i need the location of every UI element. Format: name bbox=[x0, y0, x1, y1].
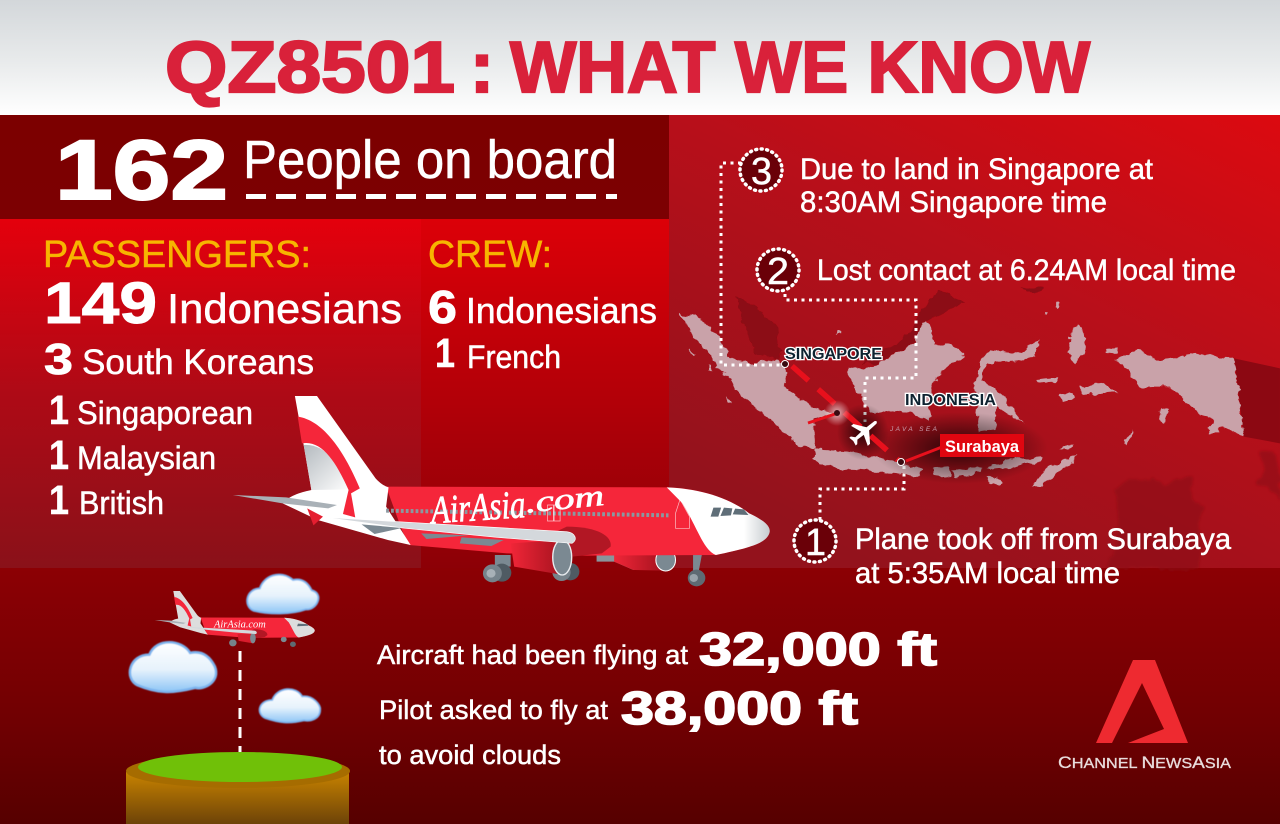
passenger count: 1 British bbox=[49, 477, 164, 523]
crew heading: CREW: bbox=[428, 234, 552, 276]
airline logo: AirAsia bbox=[427, 482, 527, 532]
passengers heading: PASSENGERS: bbox=[43, 234, 311, 276]
step 3 marker bbox=[740, 149, 782, 193]
step 1 marker: 1 bbox=[805, 522, 826, 564]
crew count: 6 Indonesians: Indonesians bbox=[466, 290, 657, 331]
total number: 162 bbox=[55, 123, 228, 217]
passenger count: 3 South Koreans: 3 bbox=[44, 335, 73, 384]
passenger count: 1 Malaysian: Malaysian bbox=[77, 440, 216, 476]
passenger count: 1 Singaporean bbox=[49, 387, 253, 433]
wing root and engine bbox=[546, 527, 611, 557]
passenger count: 1 Malaysian: 1 bbox=[49, 432, 69, 478]
Channel NewsAsia logo bbox=[1058, 660, 1231, 772]
horizontal stabiliser bbox=[233, 495, 337, 508]
label: Indonesia: INDONESIA bbox=[905, 392, 996, 409]
passenger count: 1 British: 1 bbox=[49, 477, 69, 523]
altitude text: 32,000 ft: 32,000 ft bbox=[699, 623, 937, 675]
crew count: 6 Indonesians: 6 bbox=[428, 281, 457, 333]
passenger count: 1 Singaporean: 1 bbox=[49, 387, 69, 433]
step 2 marker bbox=[757, 249, 799, 293]
logo mark bbox=[1096, 660, 1188, 743]
altitude text: 38,000 ft bbox=[379, 682, 858, 734]
passenger count: 3 South Koreans: South Koreans bbox=[82, 343, 314, 382]
flight route: Surabaya to Singapore bbox=[782, 360, 1048, 484]
step 2 marker: 2 bbox=[767, 251, 789, 293]
icon: cloud left bbox=[130, 642, 216, 692]
passenger count: 149 Indonesians bbox=[44, 271, 402, 336]
AirAsia plane illustration bbox=[233, 396, 770, 586]
rear fuselage and tail bbox=[283, 396, 411, 545]
flight path: dotted leader for step 1 bbox=[820, 462, 904, 520]
crew count: 1 French bbox=[435, 330, 561, 376]
ground cylinder bbox=[126, 752, 350, 824]
passenger count: 3 South Koreans bbox=[44, 335, 314, 384]
label: Surabaya: Surabaya bbox=[945, 437, 1020, 456]
altitude marker line bbox=[238, 651, 242, 753]
flight path: dotted leader for step 2 bbox=[785, 294, 916, 422]
Indonesian islands bbox=[680, 302, 1244, 487]
door outline bbox=[547, 499, 690, 528]
panel: people on board bbox=[0, 115, 669, 219]
cabin windows bbox=[386, 511, 669, 515]
fuselage bbox=[386, 487, 770, 556]
altitude text: 32,000 ft bbox=[377, 623, 937, 675]
map: faint Australia shading bbox=[1110, 452, 1280, 568]
title text: : bbox=[470, 28, 494, 108]
altitude text: to avoid clouds: to avoid clouds bbox=[379, 740, 561, 770]
title text: QZ8501 bbox=[165, 28, 455, 108]
passenger count: 1 British: British bbox=[79, 485, 164, 521]
step 1 text: Plane took off from Surabaya bbox=[855, 523, 1231, 556]
step 1 marker bbox=[794, 520, 836, 564]
icon: cloud right bbox=[260, 689, 320, 722]
panel: bottom section background bbox=[0, 568, 1280, 824]
icon: plane on route bbox=[844, 411, 885, 452]
crew count: 1 French: French bbox=[467, 339, 561, 375]
map of Indonesia bbox=[680, 287, 1280, 487]
Malaysia, darker land bbox=[736, 287, 1041, 364]
passenger count: 149 Indonesians: 149 bbox=[44, 271, 157, 336]
passenger count: 1 Singaporean: Singaporean bbox=[77, 395, 253, 431]
step 3: 8:30AM Singapore time bbox=[800, 186, 1107, 219]
far engine and gear bbox=[597, 553, 663, 570]
Papua New Guinea, darker land bbox=[1234, 358, 1280, 443]
icon: cloud top bbox=[247, 575, 318, 613]
cockpit windows bbox=[711, 508, 748, 517]
step 2 bbox=[757, 249, 1236, 293]
label: Singapore: SINGAPORE bbox=[785, 346, 882, 363]
title text bbox=[165, 28, 1090, 108]
step 3 text: Due to land in Singapore at bbox=[800, 153, 1154, 186]
panel: map background bbox=[669, 115, 1280, 568]
small plane illustration: AirAsia.com bbox=[213, 620, 266, 631]
title banner bbox=[0, 0, 1280, 115]
people on board label: People on board bbox=[243, 130, 617, 190]
flight path: dotted leader for step 3 bbox=[721, 163, 785, 365]
panel: passengers bbox=[0, 219, 421, 568]
step 3 bbox=[740, 149, 1154, 219]
wing bbox=[325, 517, 575, 543]
airline logo: .com bbox=[524, 479, 606, 519]
label: Java Sea: JAVA SEA bbox=[889, 426, 937, 433]
passenger count: 1 Malaysian bbox=[49, 432, 216, 478]
step 3 marker: 3 bbox=[751, 151, 772, 193]
logo wordmark: CHANNEL NEWSASIA bbox=[1058, 753, 1231, 772]
altitude text: 32,000 ft: Aircraft had been flying at bbox=[377, 640, 688, 670]
crew count: 6 Indonesians bbox=[428, 281, 657, 333]
nose bbox=[667, 487, 770, 555]
small plane illustration bbox=[155, 591, 315, 647]
step 2 text: Lost contact at 6.24AM local time bbox=[817, 254, 1236, 287]
passenger count: 149 Indonesians: Indonesians bbox=[167, 285, 402, 332]
altitude text: 38,000 ft: Pilot asked to fly at bbox=[379, 695, 608, 725]
panel: crew bbox=[421, 219, 669, 568]
title text: WHAT WE KNOW bbox=[510, 28, 1090, 108]
step 1 bbox=[794, 520, 1231, 590]
crew count: 1 French: 1 bbox=[435, 330, 455, 376]
step 1: at 5:35AM local time bbox=[855, 557, 1120, 590]
altitude text: 38,000 ft: 38,000 ft bbox=[621, 682, 858, 734]
